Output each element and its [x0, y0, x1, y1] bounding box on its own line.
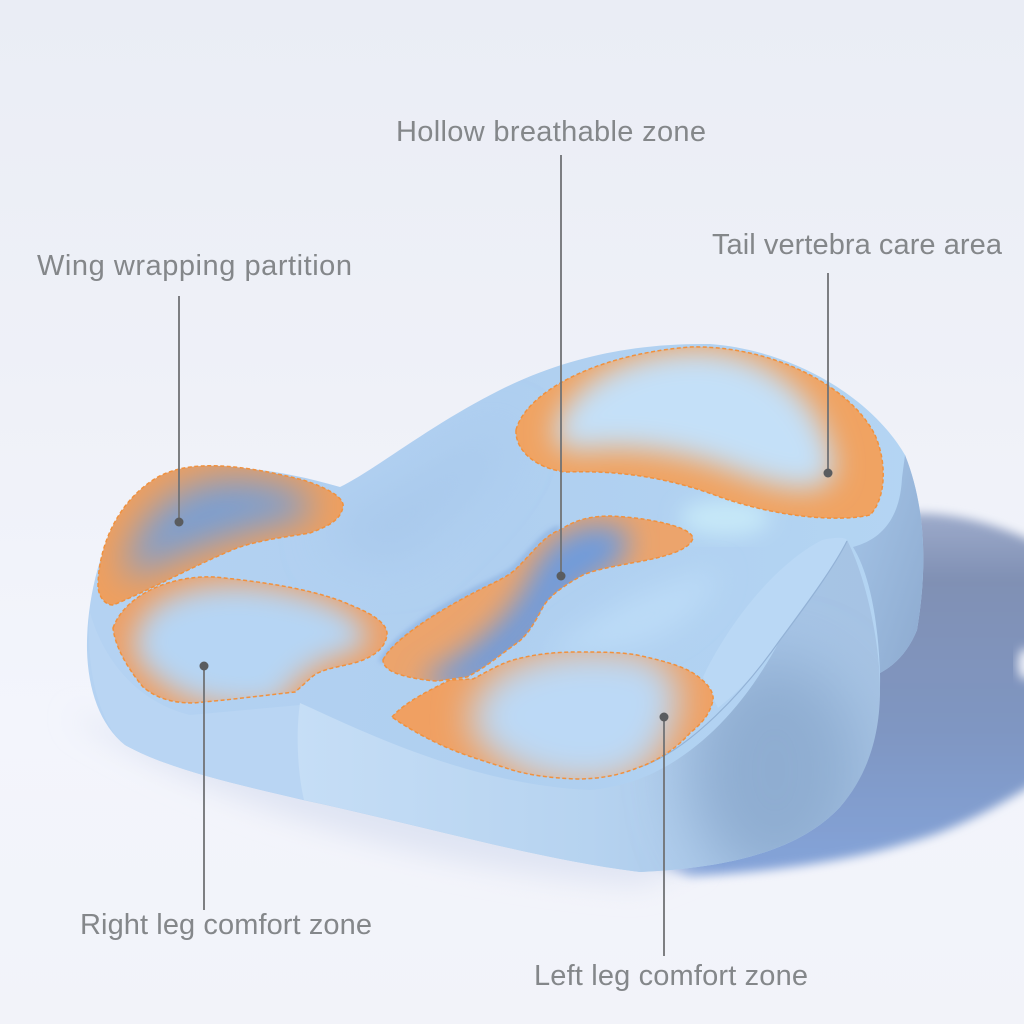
zone: tail vertebra care area	[516, 346, 884, 518]
cushion top surface	[87, 344, 923, 872]
callout: right leg comfort zone	[80, 662, 372, 941]
callout: tail vertebra care area	[712, 229, 1003, 478]
cushion	[87, 344, 923, 880]
centre and right front face	[290, 530, 890, 880]
callout: wing wrapping partition: Wing wrapping partition	[37, 250, 352, 282]
zone: wing wrapping partition	[98, 466, 344, 605]
callout: hollow breathable zone	[396, 116, 706, 580]
zone: right leg comfort zone	[113, 576, 387, 703]
cast shadow	[70, 513, 1024, 885]
callout: hollow breathable zone: Hollow breathable zone	[396, 116, 706, 148]
rear rim	[853, 455, 923, 673]
right wing ridge highlight	[703, 538, 847, 708]
zone: left leg comfort zone	[392, 652, 713, 779]
callout: left leg comfort zone	[534, 712, 808, 992]
hollow recess shadow	[381, 528, 560, 662]
dashed zone outlines	[98, 347, 883, 779]
callout: left leg comfort zone: Left leg comfort zone	[534, 960, 808, 992]
left front face	[89, 612, 304, 800]
callout: tail vertebra care area: Tail vertebra care area	[712, 229, 1003, 261]
seam lines	[640, 541, 847, 767]
zone: hollow breathable zone	[383, 516, 693, 681]
callout: right leg comfort zone: Right leg comfort zone	[80, 909, 372, 941]
surface shading	[586, 498, 768, 644]
callout: wing wrapping partition	[37, 250, 352, 526]
